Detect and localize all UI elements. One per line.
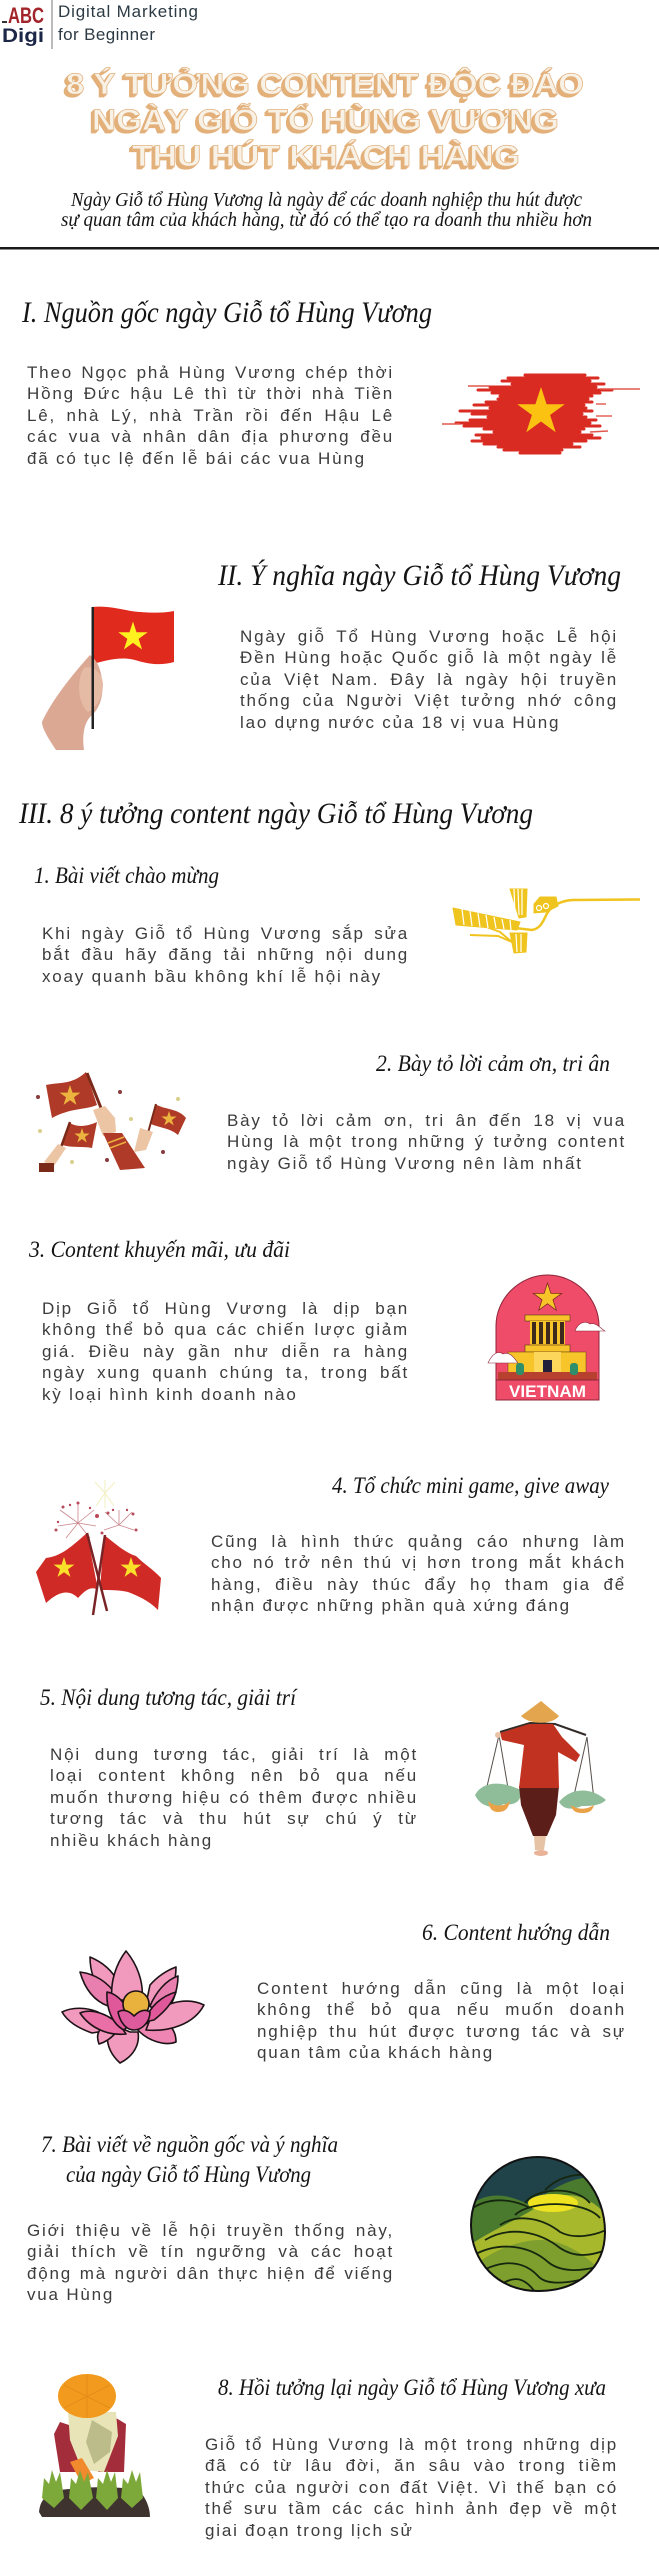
text block: idea 8: đã có từ lâu đời, ăn sâu vào trong tiềm [205,2456,618,2475]
icon: rice planting farmer [39,2374,150,2517]
heading 6: 6. Content hướng dẫn [422,1920,610,1945]
text block: section II: Đền Hùng hoặc Quốc giỗ là một ngày lễ [240,648,618,667]
text block: idea 8: thức của người con đất Việt. Vì thế bạn có [205,2478,618,2497]
text block: idea 1: bắt đầu hãy đăng tải những nội dung [42,945,409,964]
icon: Vietnam mausoleum badge [488,1275,605,1401]
title: THU HÚT KHÁCH HÀNG [132,139,520,173]
text block: idea 6: không thể bỏ qua nếu muốn doanh [257,2000,626,2019]
heading 1: 1. Bài viết chào mừng [34,863,219,888]
logo: ABC Digi: ABC [8,3,44,28]
text block: idea 3: Dịp Giỗ tổ Hùng Vương là dịp bạn [42,1298,409,1318]
text block: idea 6: Content hướng dẫn cũng là một loại [257,1978,626,1998]
text block: idea 3 [42,1298,409,1404]
text block: idea 1 [42,924,409,986]
heading 4: 4. Tổ chức mini game, give away [332,1473,610,1498]
subtitle: Ngày Giỗ tổ Hùng Vương là ngày để các doanh nghiệp thu hút được [70,189,582,211]
text block: idea 8: Giỗ tổ Hùng Vương là một trong những dịp [205,2434,618,2454]
text block: idea 5: Nội dung tương tác, giải trí là một [50,1744,418,1764]
heading 8: 8. Hồi tưởng lại ngày Giỗ tổ Hùng Vương xưa [218,2375,606,2400]
icon: crossed flags with fireworks [36,1480,161,1615]
heading 3: 3. Content khuyến mãi, ưu đãi [28,1237,290,1262]
icon: rice terrace oval [470,2155,606,2295]
subtitle: sự quan tâm của khách hàng, từ đó có thể tạo ra doanh thu nhiều hơn [61,209,592,231]
text block: idea 5: tương tác và thu hút sự chú ý từ [50,1809,418,1828]
text block: idea 1: Khi ngày Giỗ tổ Hùng Vương sắp sửa [42,924,409,942]
title: 8 Ý TƯỞNG CONTENT ĐỘC ĐÁO [66,67,584,101]
text block: idea 2 [227,1110,626,1173]
text block: section II: Ngày giỗ Tổ Hùng Vương hoặc Lễ hội [240,626,618,646]
subtitle [61,189,592,231]
text block: idea 4: cho nó trở nên thú vị hơn trong mắt khách [211,1553,626,1572]
icon: Vietnam mausoleum badge: VIETNAM [509,1382,586,1401]
title: NGÀY GIỖ TỔ HÙNG VƯƠNG [92,103,559,137]
heading 7: của ngày Giỗ tổ Hùng Vương [66,2162,311,2187]
logo: ABC Digi: Digi [2,26,44,47]
logo: ABC Digi [2,0,198,49]
text block: section II: của Việt Nam. Đây là ngày hội truyền [240,670,618,689]
text block: idea 3: giá. Điều này gần như diễn ra hàng [42,1342,409,1361]
logo: ABC Digi: for Beginner [58,25,155,44]
icon: lotus flower [62,1951,204,2063]
text block: idea 4: Cũng là hình thức quảng cáo nhưng làm [211,1532,626,1550]
heading II: II. Ý nghĩa ngày Giỗ tổ Hùng Vương [217,559,621,592]
text block: idea 7: động mà người dân thực hiện để viếng [27,2264,394,2283]
icon: golden bird [453,889,640,953]
text block: section I [27,362,394,468]
text block: idea 5: muốn thương hiệu có thêm được nhiều [50,1788,418,1807]
heading 5: 5. Nội dung tương tác, giải trí [40,1685,298,1710]
header divider rule [0,247,659,250]
text block: idea 7 [27,2220,394,2304]
text block: idea 8: thể sưu tầm các các hình ảnh đẹp về một [205,2499,618,2518]
heading 7: 7. Bài viết về nguồn gốc và ý nghĩa [41,2132,338,2157]
logo: ABC Digi: Digital Marketing [58,2,198,21]
text block: section II: lao dựng nước của 18 vị vua Hùng [240,713,560,732]
text block: idea 4: nhận được những phần quà xứng đáng [211,1596,571,1615]
text block: idea 7: vua Hùng [27,2285,114,2304]
text block: idea 8 [205,2434,618,2540]
text block: idea 4: hàng, điều này thúc đẩy họ tham gia để [211,1575,626,1594]
heading III: III. 8 ý tưởng content ngày Giỗ tổ Hùng Vương [18,797,533,830]
text block: section I: Hồng Đức hậu Lê thì từ thời nhà Tiền [27,384,394,403]
text block: idea 5: nhiều khách hàng [50,1831,213,1850]
icon: brush stroke Vietnam flag [442,375,640,453]
text block: section I: Theo Ngọc phả Hùng Vương chép thời [27,362,394,382]
heading 2: 2. Bày tỏ lời cảm ơn, tri ân [376,1051,610,1076]
text block: idea 6 [257,1978,626,2062]
heading 7 [41,2132,338,2187]
icon: hand holding flag [42,607,174,750]
text block: idea 1: xoay quanh bầu không khí lễ hội này [42,967,382,986]
text block: section I: Lê, nhà Lý, nhà Trần rồi đến Hậu Lê [27,406,394,425]
icon: hands waving flags [36,1072,186,1172]
text block: idea 6: nghiệp thu hút được tương tác và sự [257,2022,626,2041]
text block: section I: các vua và nhân dân địa phương đều [27,427,394,446]
text block: section I: đã có tục lệ đến lễ bái các vua Hùng [27,449,366,468]
text block: idea 8: giai đoạn trong lịch sử [205,2521,414,2540]
text block: section II: thống của Người Việt tưởng nhớ công [240,691,618,710]
text block: idea 2: ngày Giỗ tổ Hùng Vương nên làm nhất [227,1154,583,1173]
text block: idea 2: Bày tỏ lời cảm ơn, tri ân đến 18 vị vua [227,1110,626,1130]
title [66,67,584,173]
text block: idea 3: không thể bỏ qua các chiến lược giảm [42,1320,409,1339]
text block: idea 7: giải thích về tín ngưỡng và các hoạt [27,2242,394,2261]
icon: woman with carrying pole [475,1701,606,1856]
text block: idea 3: ngày xung quanh chúng ta, trong bất [42,1363,409,1382]
text block: idea 3: kỳ loại hình kinh doanh nào [42,1385,298,1404]
text block: idea 7: Giới thiệu về lễ hội truyền thống này, [27,2220,394,2240]
text block: idea 5 [50,1744,418,1850]
text block: idea 4 [211,1532,626,1615]
text block: section II [240,626,618,732]
text block: idea 2: Hùng là một trong những ý tưởng content [227,1132,626,1151]
text block: idea 5: loại content không nên bỏ qua nếu [50,1766,418,1785]
heading I: I. Nguồn gốc ngày Giỗ tổ Hùng Vương [21,296,432,329]
text block: idea 6: quan tâm của khách hàng [257,2043,494,2062]
